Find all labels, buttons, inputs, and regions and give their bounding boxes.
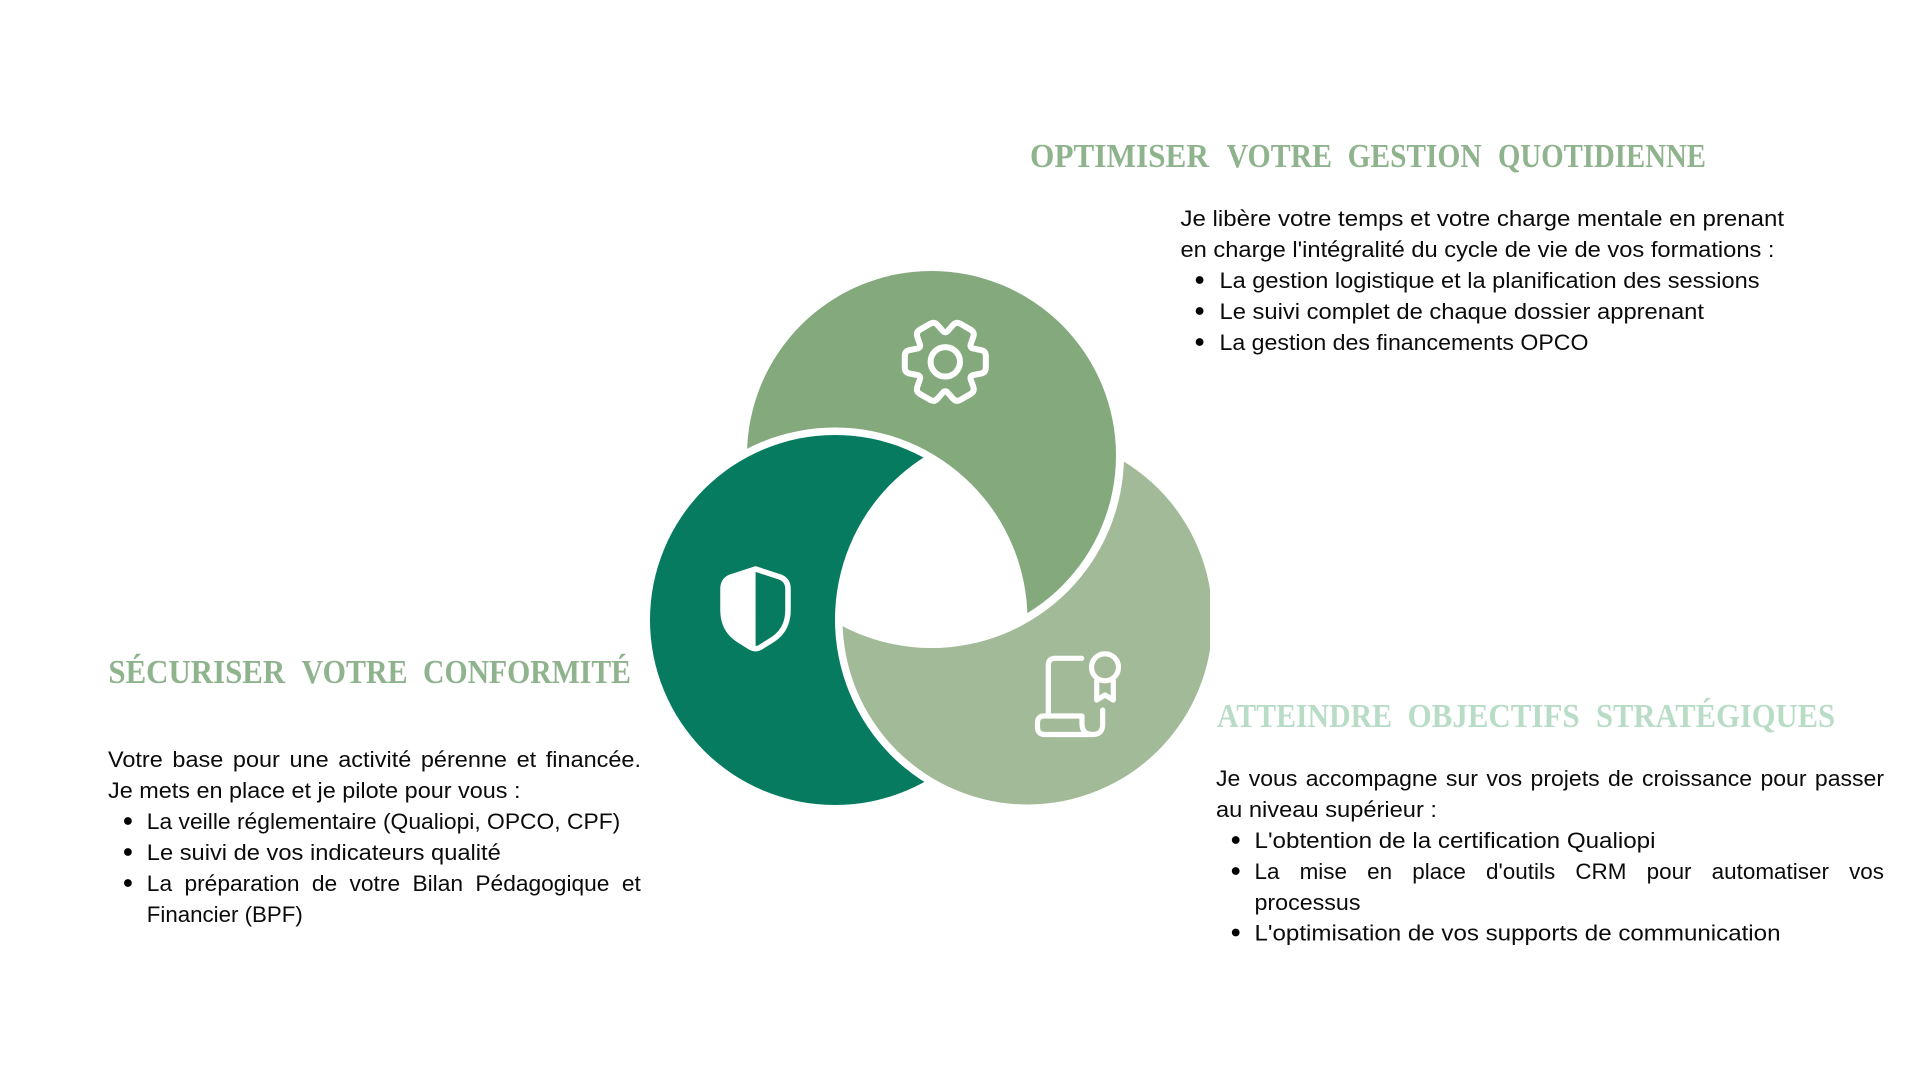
intro text: Votre base pour une activité pérenne et financée.	[108, 747, 641, 772]
bullet list	[124, 809, 642, 927]
bullet list: La préparation de votre Bilan Pédagogique et	[147, 871, 642, 896]
heading: QUOTIDIENNE	[1498, 138, 1706, 175]
heading: OPTIMISER	[1030, 138, 1210, 175]
crescent: conformité	[650, 435, 924, 805]
heading: VOTRE	[1227, 138, 1332, 175]
bullet list: La veille réglementaire (Qualiopi, OPCO, CPF)	[147, 809, 620, 834]
bullet list: Le suivi de vos indicateurs qualité	[147, 840, 501, 865]
heading: ATTEINDRE	[1217, 698, 1392, 735]
intro text: Je libère votre temps et votre charge mentale en prenant	[1180, 206, 1785, 231]
heading: CONFORMITÉ	[423, 654, 631, 691]
bullet list	[1232, 828, 1884, 946]
bullet list: La mise en place d'outils CRM pour automatiser vos	[1254, 859, 1884, 884]
crescent: objectifs stratégiques	[842, 434, 1212, 804]
bullet list: processus	[1254, 890, 1360, 915]
panel: atteindre objectifs stratégiques	[1216, 698, 1884, 946]
heading: SÉCURISER	[108, 654, 286, 691]
intro text	[1216, 766, 1884, 822]
bullet list: Le suivi complet de chaque dossier apprenant	[1220, 299, 1705, 324]
diagram: three interlocking crescents	[650, 271, 1212, 805]
intro text: Je mets en place et je pilote pour vous :	[108, 778, 520, 803]
heading: OBJECTIFS	[1408, 698, 1580, 735]
intro text: en charge l'intégralité du cycle de vie de vos formations :	[1180, 237, 1774, 262]
bullet list: Financier (BPF)	[147, 902, 303, 927]
bullet list: L'obtention de la certification Qualiopi	[1254, 828, 1656, 853]
icon: gear	[905, 323, 986, 401]
bullet list: La gestion logistique et la planification des sessions	[1220, 268, 1760, 293]
intro text: au niveau supérieur :	[1216, 797, 1437, 822]
panel: optimiser votre gestion quotidienne	[1030, 138, 1785, 355]
intro text	[1180, 206, 1785, 262]
crescent: gestion quotidienne	[747, 271, 1116, 640]
intro text	[108, 747, 641, 803]
icon: shield	[723, 569, 788, 649]
heading: STRATÉGIQUES	[1596, 698, 1835, 735]
bullet list: L'optimisation de vos supports de communication	[1254, 920, 1780, 946]
heading: VOTRE	[302, 654, 408, 691]
bullet list: La gestion des financements OPCO	[1220, 330, 1588, 355]
heading: GESTION	[1348, 138, 1482, 175]
icon: certificate scroll	[1038, 654, 1118, 734]
intro text: Je vous accompagne sur vos projets de croissance pour passer	[1216, 766, 1884, 791]
bullet list	[1196, 268, 1760, 355]
panel: sécuriser votre conformité	[108, 654, 642, 927]
